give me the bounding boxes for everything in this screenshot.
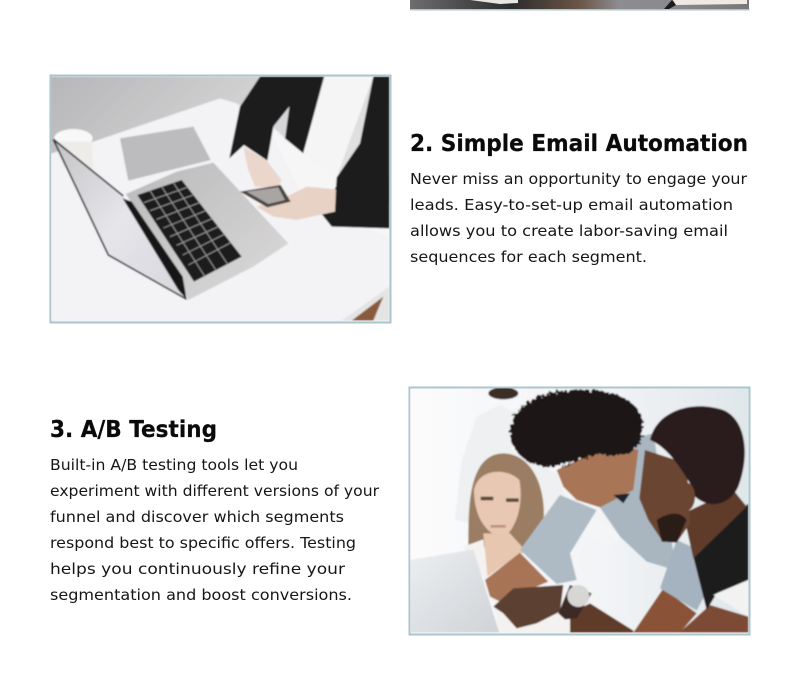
background <box>410 388 748 633</box>
section 3 text block: segmentation and boost conversions. <box>50 586 352 604</box>
section 3 text block: respond best to specific offers. Testing <box>50 534 356 552</box>
section 3 text block: funnel and discover which segments <box>50 508 344 526</box>
section 2 text block: leads. Easy-to-set-up email automation <box>410 196 733 214</box>
laptop base <box>126 163 288 300</box>
desk corner with wood <box>342 287 389 321</box>
man on right <box>633 406 748 633</box>
hand and watch <box>493 585 633 633</box>
laptop screen <box>53 139 187 299</box>
section 2 text block: sequences for each segment. <box>410 248 647 266</box>
section 3 text block: experiment with different versions of your <box>50 482 380 500</box>
section 2 text block <box>410 170 748 266</box>
photo: laptop and phone on white desk <box>50 76 390 322</box>
section 3 text block: Built-in A/B testing tools let you <box>50 456 298 474</box>
white shirt <box>303 77 373 177</box>
keyboard <box>137 180 242 282</box>
section 2 text block: allows you to create labor-saving email <box>410 222 728 240</box>
photo: cropped image at top <box>410 0 750 10</box>
sleeve <box>585 510 622 547</box>
hinge <box>123 198 187 299</box>
paper cup <box>54 129 93 170</box>
photo: three colleagues at a laptop <box>410 387 750 634</box>
section 2 heading: 2. Simple Email Automation <box>410 129 748 157</box>
desk <box>51 98 389 321</box>
jacket <box>229 77 389 228</box>
section 3 text block: helps you continuously refine your <box>50 560 346 578</box>
wall background <box>51 77 389 177</box>
person in white at back <box>456 388 520 522</box>
hands <box>243 147 336 220</box>
section 3 text block <box>50 456 380 604</box>
woman <box>465 452 545 632</box>
section 2 text block: Never miss an opportunity to engage your <box>410 170 748 188</box>
section 3 heading: 3. A/B Testing <box>50 415 217 443</box>
laptop <box>410 549 499 633</box>
phone <box>240 185 291 207</box>
man with curly hair <box>485 390 677 602</box>
grey folder <box>120 127 211 181</box>
